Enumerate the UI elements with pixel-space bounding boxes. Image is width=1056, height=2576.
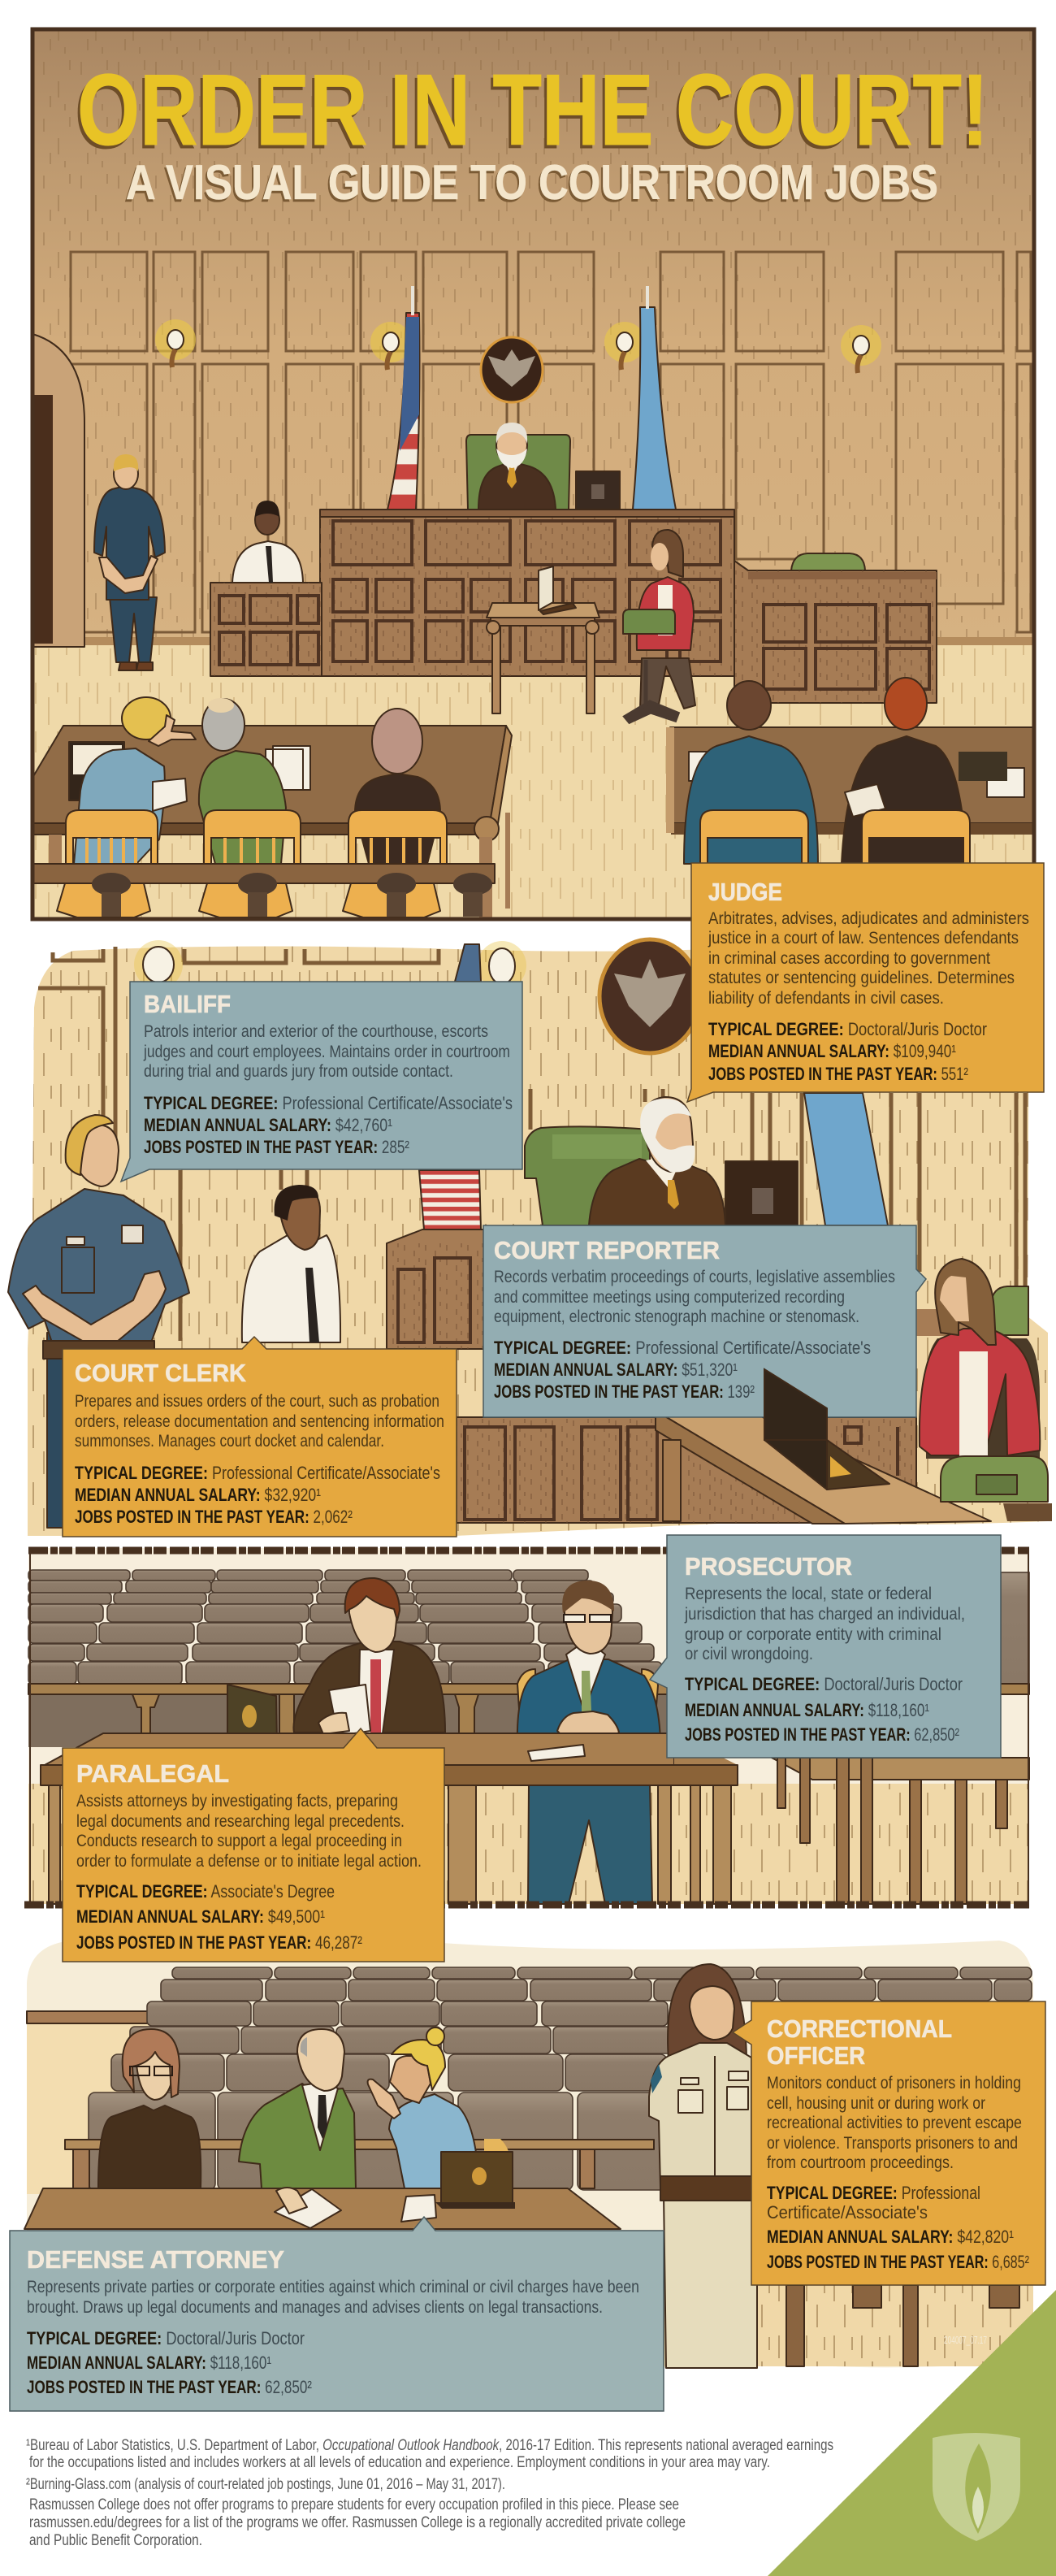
paralegal stats: JOBS POSTED IN THE PAST YEAR: 46,287²: [76, 1932, 362, 1953]
far table: [772, 1758, 1029, 1904]
seated figures left: [74, 697, 440, 864]
paralegal description: Assists attorneys by investigating facts, preparing: [76, 1792, 398, 1811]
court reporter stats: TYPICAL DEGREE: Professional Certificate/Associate's: [494, 1338, 871, 1358]
table: [24, 2188, 621, 2229]
rail: [28, 1684, 1029, 1733]
court clerk stats: [75, 1463, 440, 1527]
monitor: [576, 471, 620, 510]
wainscot panels: [71, 252, 1031, 632]
paralegal whispering: [368, 2027, 510, 2188]
bailiff stats: TYPICAL DEGREE: Professional Certificate/Associate's: [144, 1093, 513, 1113]
defense attorney heading: DEFENSE ATTORNEY: [27, 2245, 284, 2274]
seated figures right: [684, 678, 967, 864]
correctional officer stats: TYPICAL DEGREE: Professional: [767, 2183, 980, 2203]
frame edges: [24, 1550, 1029, 1905]
court reporter: [623, 530, 695, 722]
artwork code: 204007_07.17: [944, 2334, 987, 2346]
prosecutor description: Represents the local, state or federal: [685, 1585, 932, 1603]
paralegal description: order to formulate a defense or to initiate legal action.: [76, 1852, 422, 1871]
judge: [466, 423, 570, 510]
bailiff stats: [144, 1093, 513, 1157]
correctional officer heading: CORRECTIONAL: [767, 2014, 952, 2043]
court clerk description: summonses. Manages court docket and calendar.: [75, 1432, 384, 1451]
court clerk heading: COURT CLERK: [75, 1359, 247, 1387]
seal: [599, 939, 700, 1053]
prosecutor description: or civil wrongdoing.: [685, 1645, 813, 1663]
jury box: [734, 553, 937, 703]
court reporter stats: MEDIAN ANNUAL SALARY: $51,320¹: [494, 1360, 738, 1380]
panel: defense attorney callout: [10, 2217, 664, 2411]
court reporter heading: COURT REPORTER: [494, 1236, 720, 1264]
court clerk description: [75, 1392, 444, 1451]
court reporter description: [494, 1268, 895, 1326]
judge chair: [525, 1126, 650, 1225]
defense attorney stats: TYPICAL DEGREE: Doctoral/Juris Doctor: [27, 2328, 305, 2348]
correctional officer description: [767, 2074, 1022, 2172]
prosecutor description: [684, 1585, 965, 1663]
lamps: [134, 940, 526, 990]
defense attorney description: Represents private parties or corporate entities against which criminal or civil charges have been: [27, 2278, 639, 2296]
footnotes: ²Burning-Glass.com (analysis of court-related job postings, June 01, 2016 – May 31, 2017).: [26, 2476, 505, 2493]
court reporter description: Records verbatim proceedings of courts, legislative assemblies: [494, 1268, 895, 1286]
court reporter description: equipment, electronic stenograph machine or stenomask.: [494, 1308, 859, 1326]
judge description: [708, 909, 1029, 1008]
judge stats: MEDIAN ANNUAL SALARY: $109,940¹: [708, 1041, 956, 1061]
panel: courtroom overview scene: [32, 29, 1034, 919]
paralegal figure: [227, 1578, 445, 1746]
panel: court clerk callout: [63, 1337, 457, 1537]
panel: bailiff callout: [121, 982, 522, 1182]
footnotes: for the occupations listed and includes workers at all levels of education and experience. Employment conditions in your area may vary.: [29, 2454, 770, 2471]
bailiff stats: JOBS POSTED IN THE PAST YEAR: 285²: [144, 1137, 409, 1157]
defense attorney stats: MEDIAN ANNUAL SALARY: $118,160¹: [27, 2353, 271, 2373]
court reporter: [916, 1259, 1052, 1521]
defense attorney: [239, 2029, 356, 2188]
defense attorney stats: [27, 2328, 312, 2397]
defense attorney description: [27, 2278, 639, 2317]
background: [28, 1548, 1029, 1904]
bailiff description: during trial and guards jury from outside contact.: [144, 1062, 453, 1081]
laptop: [764, 1369, 889, 1490]
paralegal description: [76, 1792, 422, 1871]
court clerk description: Prepares and issues orders of the court, such as probation: [75, 1392, 439, 1411]
left counsel table: [32, 726, 512, 918]
bailiff description: [143, 1022, 510, 1081]
paralegal heading: PARALEGAL: [76, 1759, 229, 1788]
spectator rail: [32, 864, 495, 917]
correctional officer stats: Certificate/Associate's: [767, 2202, 928, 2223]
judge heading: JUDGE: [708, 878, 782, 906]
wall: [32, 29, 1034, 655]
court clerk stats: JOBS POSTED IN THE PAST YEAR: 2,062²: [75, 1507, 353, 1527]
prosecutor stats: TYPICAL DEGREE: Doctoral/Juris Doctor: [685, 1674, 963, 1694]
judge stats: [708, 1019, 987, 1084]
client figure: [98, 2029, 201, 2188]
footnotes: ¹Bureau of Labor Statistics, U.S. Department of Labor, Occupational Outlook Handbook, 2016-17 Edition. This represents national averaged earnings: [26, 2437, 833, 2454]
panel: prosecutor and paralegal scene: [24, 1548, 1029, 1905]
prosecutor stats: [685, 1674, 963, 1745]
judge stats: TYPICAL DEGREE: Doctoral/Juris Doctor: [708, 1019, 987, 1039]
American flag: [387, 286, 419, 510]
bailiff description: Patrols interior and exterior of the courthouse, escorts: [144, 1022, 488, 1041]
icon: shield logo: [933, 2433, 1020, 2541]
bailiff heading: BAILIFF: [144, 990, 231, 1018]
prosecutor chair: [517, 1669, 658, 1734]
reporter desk: [656, 1411, 991, 1524]
rail: [65, 2140, 654, 2188]
wall background: [28, 943, 1048, 1536]
court reporter description: and committee meetings using computerized recording: [494, 1288, 845, 1307]
defense attorney stats: JOBS POSTED IN THE PAST YEAR: 62,850²: [27, 2377, 312, 2397]
subtitle: A VISUAL GUIDE TO COURTROOM JOBS: [126, 155, 938, 210]
bailiff description: judges and court employees. Maintains order in courtroom: [143, 1043, 510, 1061]
court clerk: [232, 501, 303, 583]
prosecutor description: group or corporate entity with criminal: [685, 1625, 941, 1644]
footnotes: Rasmussen College does not offer programs to prepare students for every occupation profiled in this piece. Please see: [29, 2496, 679, 2513]
footnotes: [26, 2437, 833, 2549]
lower bench panelling: [457, 1417, 916, 1523]
footnotes: rasmussen.edu/degrees for a list of the programs we offer. Rasmussen College is a regionally accredited private college: [29, 2514, 686, 2531]
court clerk description: orders, release documentation and sentencing information: [75, 1412, 444, 1431]
defense attorney description: brought. Draws up legal documents and manages and advises clients on legal transactions.: [27, 2298, 603, 2317]
panel: correctional officer callout: [733, 2001, 1045, 2285]
correctional officer heading: [767, 2014, 952, 2070]
correctional officer stats: [767, 2183, 1029, 2272]
judge description: statutes or sentencing guidelines. Determines: [708, 969, 1015, 987]
seat rows: [28, 1570, 1029, 1747]
bailiff: [94, 454, 165, 670]
judge bench: [320, 510, 734, 676]
wall panelling: [38, 947, 1025, 1341]
judge description: in criminal cases according to government: [708, 949, 990, 968]
prosecutor figure: [517, 1581, 660, 1747]
court bench side: [387, 1229, 487, 1349]
scene frame: [32, 29, 1034, 919]
footnotes: and Public Benefit Corporation.: [29, 2532, 202, 2549]
clerk desk: [210, 583, 322, 676]
correctional officer description: cell, housing unit or during work or: [767, 2094, 985, 2113]
panel: defense table scene: [24, 1936, 1033, 2368]
monitor: [725, 1161, 798, 1225]
prosecutor legs: [528, 1784, 652, 1904]
bailiff: [8, 1115, 189, 1528]
judge description: liability of defendants in civil cases.: [708, 989, 944, 1008]
officer floor: [664, 2194, 1033, 2366]
laptop: [435, 2152, 515, 2209]
court seal: [481, 337, 543, 402]
floor: [32, 644, 1034, 919]
US flag: [419, 1170, 481, 1229]
paralegal stats: TYPICAL DEGREE: Associate's Degree: [76, 1881, 335, 1902]
prosecutor description: jurisdiction that has charged an individual,: [684, 1605, 965, 1624]
paralegal stats: MEDIAN ANNUAL SALARY: $49,500¹: [76, 1906, 325, 1927]
state flag: [804, 1093, 888, 1225]
panel: prosecutor callout: [650, 1535, 1001, 1758]
stenographer table: [487, 566, 599, 713]
correctional officer stats: MEDIAN ANNUAL SALARY: $42,820¹: [767, 2227, 1014, 2247]
panel: paralegal callout: [63, 1728, 444, 1962]
seat rows: [89, 1967, 1032, 2190]
wall base: [27, 2011, 149, 2194]
right counsel table: [666, 727, 1034, 835]
court clerk stats: TYPICAL DEGREE: Professional Certificate/Associate's: [75, 1463, 440, 1483]
main table: [41, 1733, 738, 1904]
court reporter stats: [494, 1338, 871, 1402]
laptop lid over reporter callout: [764, 1369, 827, 1440]
green corner: [768, 2290, 1056, 2576]
correctional officer description: from courtroom proceedings.: [767, 2153, 954, 2172]
judge description: justice in a court of law. Sentences defendants: [708, 929, 1019, 948]
bailiff stats: MEDIAN ANNUAL SALARY: $42,760¹: [144, 1115, 392, 1135]
correctional officer: [649, 1964, 757, 2368]
judge stats: JOBS POSTED IN THE PAST YEAR: 551²: [708, 1064, 968, 1084]
paralegal stats: [76, 1881, 362, 1953]
paralegal description: Conducts research to support a legal proceeding in: [76, 1832, 402, 1850]
prosecutor stats: JOBS POSTED IN THE PAST YEAR: 62,850²: [685, 1724, 959, 1745]
panel: bench close-up scene: [8, 939, 1052, 1536]
court clerk: [242, 1185, 340, 1342]
court reporter stats: JOBS POSTED IN THE PAST YEAR: 139²: [494, 1381, 755, 1402]
chairs: [66, 810, 970, 864]
prosecutor stats: MEDIAN ANNUAL SALARY: $118,160¹: [685, 1700, 929, 1720]
panel: court reporter callout: [483, 1225, 926, 1417]
prosecutor heading: PROSECUTOR: [685, 1552, 852, 1581]
paralegal description: legal documents and researching legal precedents.: [76, 1812, 405, 1831]
state flag: [633, 286, 676, 510]
wall lamps: [155, 319, 881, 373]
doorway: [32, 334, 84, 647]
court clerk stats: MEDIAN ANNUAL SALARY: $32,920¹: [75, 1485, 321, 1505]
judge: [589, 1097, 725, 1225]
panel: judge callout: [687, 863, 1044, 1102]
background: [27, 1936, 1033, 2368]
correctional officer heading: OFFICER: [767, 2041, 865, 2070]
